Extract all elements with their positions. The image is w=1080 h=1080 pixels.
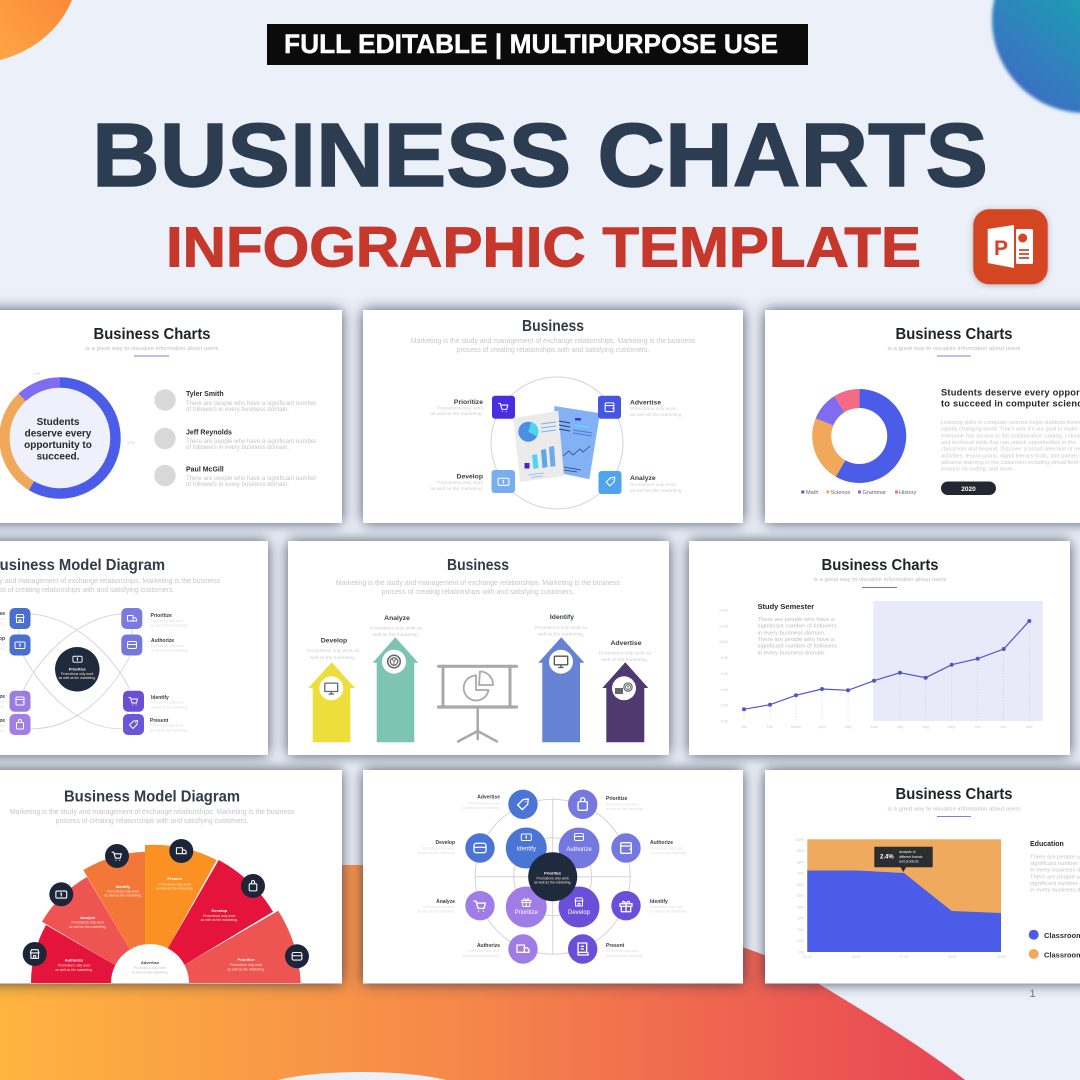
year button: 2020 xyxy=(961,486,976,493)
chart: study semester line: 12.00 xyxy=(719,624,728,628)
label: Identify xyxy=(535,614,588,638)
heading: Business Model Diagram xyxy=(64,789,240,806)
person: Paul McGill: of followers in every business domain. xyxy=(186,481,289,488)
labels: right side: as well as the marketing. xyxy=(606,807,643,811)
person: Paul McGill: Paul McGill xyxy=(186,466,224,474)
icon: truck badge xyxy=(169,839,193,863)
subheading: is a great way to visualize information about users xyxy=(86,346,219,352)
chart: stacked area: 16:00 xyxy=(852,955,860,959)
labels: right column xyxy=(150,613,188,732)
chart: stacked area: 60% xyxy=(797,883,805,887)
labels: right column: Authorize xyxy=(151,638,174,644)
chart: study semester line: 4.00 xyxy=(721,688,728,692)
center node: Promotions only work xyxy=(61,672,94,676)
page number: 1 xyxy=(1030,988,1036,1000)
label: Develop: well as the marketing. xyxy=(310,655,356,661)
chart: study semester line: 2.00 xyxy=(721,704,728,708)
label: Advertise xyxy=(599,640,652,663)
label: Identify: Identify xyxy=(550,614,574,621)
heading: Business Charts xyxy=(896,786,1013,803)
chart: stacked area: 70% xyxy=(797,872,805,876)
chart: stacked area: 20% xyxy=(797,928,805,932)
labels: left side: Develop xyxy=(436,840,455,846)
panel: arrows and presentation board xyxy=(288,541,669,755)
segment labels: Prioritize xyxy=(237,957,255,962)
segment labels: as well as the marketing. xyxy=(131,970,169,974)
panel: donut with people xyxy=(0,310,342,523)
labels: left side: as well as the marketing. xyxy=(418,851,455,855)
label: Analyze: Analyze xyxy=(630,475,656,482)
segment labels: Authorize xyxy=(65,958,84,963)
callout: different brands xyxy=(899,855,923,859)
chart: study semester line: Nov xyxy=(1000,725,1007,729)
labels: right side: Promotions only work xyxy=(650,846,683,850)
node: Identify xyxy=(506,828,547,868)
person: Tyler Smith: Tyler Smith xyxy=(186,391,224,398)
icon: money badge xyxy=(49,882,73,906)
icon: truck tile xyxy=(121,608,142,629)
node: Authorize: Authorize xyxy=(566,847,592,853)
chart: study semester line: Dec xyxy=(1026,725,1033,729)
segment labels: Present xyxy=(167,876,183,881)
segment labels: Promotions only work xyxy=(134,966,167,970)
center node: Prioritize xyxy=(69,666,87,672)
labels: left side: as well as the marketing. xyxy=(463,954,500,958)
legend: Grammar xyxy=(862,490,886,496)
labels: right column: as well as the marketing. xyxy=(151,648,188,652)
labels: right column: Identify xyxy=(151,695,169,701)
year button xyxy=(941,482,996,495)
description: process of creating relationships with and satisfying customers. xyxy=(457,347,649,354)
labels: right side: Present xyxy=(606,943,625,949)
icon: card tile xyxy=(121,634,142,656)
segment labels: Identify xyxy=(116,884,131,889)
icon: PowerPoint app: P xyxy=(994,237,1008,260)
labels: right side: Prioritize xyxy=(606,796,628,802)
labels: left side: Advertise xyxy=(477,795,500,801)
legend: Science xyxy=(830,490,850,496)
chart: progress donut: 14% xyxy=(33,372,41,376)
center node xyxy=(55,647,100,692)
chart: study semester line: July xyxy=(897,725,903,729)
text block: Education xyxy=(1030,841,1080,894)
chart: progress donut: 47% xyxy=(127,441,135,445)
label: Develop: Develop xyxy=(457,474,483,480)
labels: right column: as well as the marketing. xyxy=(150,624,188,628)
labels: right column: Prioritize xyxy=(150,613,172,619)
panel: semicircle fan diagram xyxy=(0,770,342,984)
chart: study semester line: 10.00 xyxy=(719,640,728,644)
labels: right side: as well as the marketing. xyxy=(606,954,643,958)
decoration: bottom light ellipse xyxy=(257,1072,467,1080)
segment labels: Promotions only work xyxy=(58,964,91,968)
legend xyxy=(1029,930,1080,960)
text block: Study Semester: There are people who have a xyxy=(758,617,835,623)
chart: stacked area: 100% xyxy=(795,838,805,842)
labels: right side: as well as the marketing. xyxy=(650,910,687,914)
arrow: Advertise xyxy=(602,662,648,742)
icon: bag badge xyxy=(241,874,265,898)
chart: stacked area: 17:00 xyxy=(900,955,908,959)
icon: bag tile xyxy=(10,714,30,735)
main title: BUSINESS CHARTS xyxy=(92,106,988,206)
chart: study semester line: 0.00 xyxy=(721,720,728,724)
chart: study semester line: 14.00 xyxy=(719,608,728,612)
chart: stacked area: 0% xyxy=(799,950,805,954)
chart: study semester line xyxy=(719,601,1043,729)
segment labels: Develop xyxy=(212,908,228,913)
icon: tag tile xyxy=(123,714,144,735)
segment labels: Promotions only work xyxy=(203,914,236,918)
person: Jeff Reynolds: of followers in every business domain. xyxy=(186,444,289,451)
heading: Business Charts xyxy=(94,326,211,343)
legend: History xyxy=(899,490,917,496)
center node: Promotions only work xyxy=(536,876,569,880)
arrow: Analyze xyxy=(373,637,418,742)
labels: right side: as well as the marketing. xyxy=(650,851,687,855)
label: Develop: as well as the marketing. xyxy=(430,486,483,492)
subheading: is a great way to visualize information about users xyxy=(888,806,1021,812)
icon: store badge xyxy=(23,942,47,966)
person: Jeff Reynolds: Jeff Reynolds xyxy=(186,430,232,436)
subheading: is a great way to visualize information about users xyxy=(814,577,947,583)
person: Paul McGill: There are people who have a significant number xyxy=(186,475,316,482)
text block: Study Semester: significant number of followers xyxy=(758,624,837,630)
person: Paul McGill xyxy=(154,465,316,488)
label: Identify: Promotions only work as xyxy=(535,625,588,631)
segment labels: as well as the marketing. xyxy=(227,968,265,972)
labels: left side: Analyze xyxy=(436,899,455,905)
chart: study semester line: April xyxy=(818,725,826,729)
label: Analyze xyxy=(370,615,423,638)
chart: stacked area: 90% xyxy=(797,849,805,853)
icon: money tile xyxy=(10,634,30,656)
decoration: top-left orange blob xyxy=(0,0,72,60)
label: Develop: Promotions only work xyxy=(437,480,484,486)
segment labels: Advertise xyxy=(141,960,160,965)
labels: right side: Identify xyxy=(650,899,668,905)
labels: left side: Promotions only work xyxy=(468,802,500,806)
connector rings and cross xyxy=(475,798,630,954)
legend xyxy=(801,490,917,496)
panel: line chart xyxy=(689,541,1070,755)
label: Prioritize: as well as the marketing. xyxy=(430,411,483,417)
chart: study semester line: Sept xyxy=(948,725,955,729)
node: Authorize xyxy=(558,828,600,868)
label: Analyze xyxy=(630,475,683,494)
body text: and technical skills that can unlock opportunities in the xyxy=(941,440,1076,446)
top banner xyxy=(267,24,808,65)
labels: left side: Authorize xyxy=(477,943,500,949)
icon: cart tile xyxy=(492,396,515,419)
label: Advertise xyxy=(630,400,683,418)
segment labels: Promotions only work xyxy=(158,882,191,886)
chart: progress donut: opportunity to xyxy=(24,440,92,451)
labels: right column: Promotions only work xyxy=(151,700,184,704)
heading: Business xyxy=(447,557,509,574)
labels: right side: Promotions only work xyxy=(606,802,639,806)
segment labels: as well as the marketing. xyxy=(69,925,106,929)
label: Advertise: well as the marketing. xyxy=(602,657,648,663)
labels: left column xyxy=(0,611,5,732)
chart: stacked area: 40% xyxy=(797,906,805,910)
callout: and products. xyxy=(899,860,920,864)
labels: right column: as well as the marketing. xyxy=(150,728,187,732)
node: Prioritize xyxy=(506,886,547,928)
icon: wallet tile xyxy=(10,691,30,712)
chart: stacked area: 18:00 xyxy=(948,955,956,959)
panel: business model orbit diagram xyxy=(0,541,268,755)
icon: cart tile xyxy=(123,691,144,712)
labels: right column: Promotions only work xyxy=(151,644,184,648)
icon: money tile xyxy=(492,470,515,493)
label: Advertise: Promotions only work xyxy=(630,406,676,412)
chart: stacked area xyxy=(795,838,1006,959)
labels: right column: Present xyxy=(150,718,169,724)
node: Develop: Develop xyxy=(568,910,591,916)
label: Identify: well as the marketing. xyxy=(538,632,584,638)
labels: right column: Promotions only work xyxy=(150,724,183,728)
chart: study semester line: June xyxy=(870,725,878,729)
heading: Business Charts xyxy=(896,326,1013,343)
node: Develop xyxy=(558,886,600,928)
chart: study semester line: 8.00 xyxy=(721,656,728,660)
heading: Business Charts xyxy=(822,557,939,574)
decoration: top-right blue blob xyxy=(992,0,1080,113)
label: Advertise: Advertise xyxy=(611,640,642,647)
node: Prioritize: Prioritize xyxy=(515,910,539,916)
segment labels: as well as the marketing. xyxy=(156,886,193,890)
center node: as well as the marketing. xyxy=(534,880,571,884)
top banner: FULL EDITABLE | MULTIPURPOSE USE xyxy=(284,29,778,59)
segment labels: as well as the marketing. xyxy=(55,968,93,972)
chart: study semester line: 6.00 xyxy=(721,672,728,676)
labels: right column: as well as the marketing. xyxy=(151,706,188,710)
chart: progress donut: deserve every xyxy=(25,428,92,440)
outer nodes xyxy=(465,790,641,964)
label: Analyze: Promotions only work as xyxy=(370,626,423,632)
labels: right column: Promotions only work xyxy=(150,619,183,623)
chart: study semester line: March xyxy=(791,725,801,729)
chart: study semester line: Jan xyxy=(741,725,747,729)
heading: Business xyxy=(522,318,584,335)
arrow: Identify xyxy=(538,637,584,742)
segment labels: as well as the marketing. xyxy=(201,918,238,922)
icon: presentation board xyxy=(438,666,516,742)
label: Prioritize: Promotions only work xyxy=(437,406,484,412)
chart: study semester line: May xyxy=(845,725,852,729)
labels: right side: Promotions only work xyxy=(650,905,683,909)
orbit curves xyxy=(19,614,133,729)
icon: PowerPoint app xyxy=(973,209,1048,284)
icon: wallet tile xyxy=(598,396,621,419)
panel: radial hub diagram xyxy=(363,770,743,984)
segment labels: Promotions only work xyxy=(230,963,263,967)
labels: left side: Promotions only work xyxy=(423,905,455,909)
chart: progress donut xyxy=(4,372,135,493)
chart: study semester line: Feb xyxy=(767,725,773,729)
label: Analyze: Promotions only work xyxy=(630,482,676,488)
person: Tyler Smith: There are people who have a significant number xyxy=(186,400,316,407)
text block: Study Semester: in every business domain. xyxy=(758,650,826,656)
chart: progress donut: succeed. xyxy=(37,452,80,462)
body text: activities, lesson plans, digital literacy tools, and games to xyxy=(941,453,1080,459)
label: Prioritize xyxy=(430,399,484,417)
text block: Study Semester: in every business domain. xyxy=(758,630,826,636)
labels: left side: Promotions only work xyxy=(423,846,455,850)
panel: business documents hub xyxy=(363,310,743,523)
callout: 2.4% xyxy=(880,854,894,860)
chart: study semester line: Oct xyxy=(975,725,980,729)
label: Advertise: Promotions only work as xyxy=(599,650,652,656)
label: Analyze: well as the marketing. xyxy=(373,632,419,638)
text block: Study Semester: Study Semester xyxy=(758,602,814,611)
chart: stacked area: 14:00 xyxy=(802,955,812,959)
labels: left side: as well as the marketing. xyxy=(418,910,455,914)
chart: subject donut xyxy=(822,398,897,474)
segment labels: Analyze xyxy=(80,915,96,920)
text block: Study Semester xyxy=(758,602,837,656)
segment labels xyxy=(55,876,265,974)
chart: fan segments xyxy=(31,845,301,983)
person: Tyler Smith xyxy=(154,389,316,413)
chart: stacked area: 80% xyxy=(797,860,805,864)
text block: Study Semester: There are people who have a xyxy=(758,637,835,643)
text block: Study Semester: significant number of followers xyxy=(758,644,837,650)
panel: area chart xyxy=(765,770,1080,984)
segment labels: as well as the marketing. xyxy=(104,894,142,898)
label: Develop xyxy=(430,474,484,492)
center node xyxy=(528,852,577,901)
segment labels: Promotions only work xyxy=(107,890,140,894)
person: Jeff Reynolds xyxy=(154,428,316,451)
callout xyxy=(874,847,933,872)
center node: Prioritize xyxy=(544,870,562,876)
callout: Analysis of xyxy=(899,850,915,854)
segment labels: Promotions only work xyxy=(71,920,104,924)
label: Develop xyxy=(307,638,360,661)
node: Identify: Identify xyxy=(517,846,536,852)
panel: donut chart with text xyxy=(765,310,1080,523)
decoration: bottom orange-to-red wave xyxy=(0,865,965,1080)
center node: as well as the marketing. xyxy=(59,676,96,680)
chart: stacked area: 30% xyxy=(797,917,805,921)
illustration: documents xyxy=(513,406,600,482)
person: Jeff Reynolds: There are people who have a significant number xyxy=(186,438,316,445)
icon: tag tile xyxy=(598,471,622,494)
person: Tyler Smith: of followers in every business domain. xyxy=(186,406,289,413)
label: Analyze: as well as the marketing. xyxy=(630,488,683,494)
chart: progress donut: Students xyxy=(37,417,80,428)
chart: study semester line: Aug xyxy=(922,725,929,729)
label: Develop: Promotions only work as xyxy=(307,648,360,654)
labels: left side: Promotions only work xyxy=(468,949,500,953)
body text: lessons on coding, and more. xyxy=(941,467,1015,473)
arrow: Develop xyxy=(308,662,355,742)
description: Marketing is the study and management of exchange relationships. Marketing is the business xyxy=(336,580,621,587)
labels: left side: as well as the marketing. xyxy=(463,806,500,810)
label: Develop: Develop xyxy=(321,638,347,645)
label: Prioritize: Prioritize xyxy=(454,399,483,406)
text block: Education: Education xyxy=(1030,841,1064,848)
icon: card badge xyxy=(285,944,309,968)
label: Advertise: Advertise xyxy=(630,400,661,406)
subtitle: INFOGRAPHIC TEMPLATE xyxy=(166,216,921,280)
label: Analyze: Analyze xyxy=(384,615,410,622)
description: process of creating relationships with and satisfying customers. xyxy=(56,818,248,825)
chart: stacked area: 10% xyxy=(797,939,805,943)
labels: right side: Authorize xyxy=(650,840,673,846)
label: Advertise: as well as the marketing. xyxy=(630,412,683,418)
icon: store tile xyxy=(10,608,30,629)
description: Marketing is the study and management of exchange relationships. Marketing is the business xyxy=(411,338,696,345)
legend: Math xyxy=(806,490,818,496)
chart: stacked area: 19:00 xyxy=(996,955,1006,959)
labels: right side: Promotions only work xyxy=(606,949,639,953)
subheading: is a great way to visualize information about users xyxy=(888,346,1021,352)
icon: cart badge xyxy=(105,844,129,868)
description: Marketing is the study and management of exchange relationships. Marketing is the business xyxy=(10,809,295,816)
chart: stacked area: 50% xyxy=(797,894,805,898)
labels: right side xyxy=(606,796,687,958)
labels: left side xyxy=(418,795,500,958)
description: process of creating relationships with and satisfying customers. xyxy=(382,589,574,596)
